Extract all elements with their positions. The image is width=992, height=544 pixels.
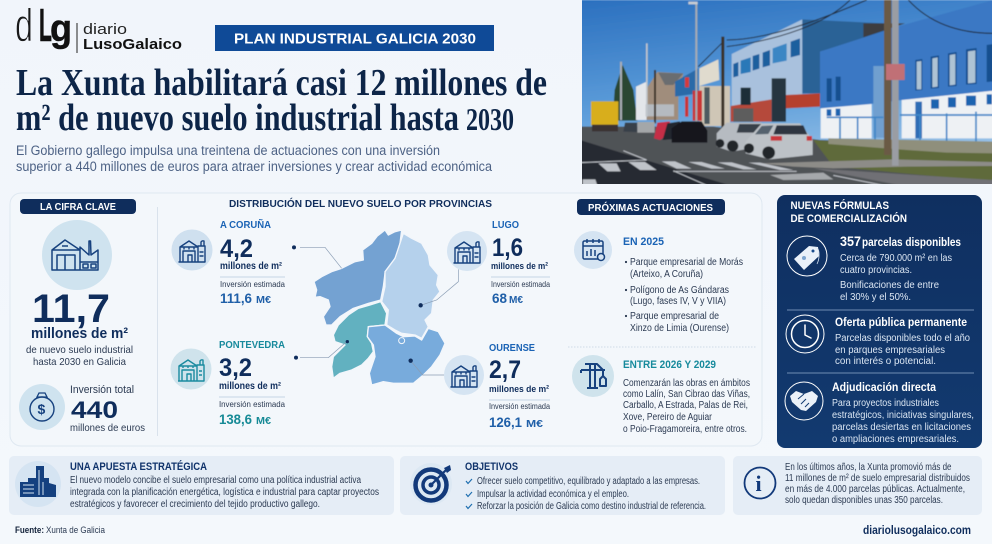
website: diariolusogalaico.com — [863, 525, 971, 537]
panel: la cifra clave — [19, 199, 145, 434]
province: Ourense: 126,1 — [489, 415, 522, 430]
icon: target — [410, 463, 452, 505]
subtitle — [16, 143, 492, 174]
item: 357 parcelas: el 30% y el 50%. — [840, 292, 911, 303]
text block: en 2025 — [623, 236, 743, 334]
key figure — [26, 287, 133, 368]
key figure: de nuevo suelo industrial — [26, 344, 133, 356]
icon: handshake — [785, 382, 823, 420]
province: A Coruña — [172, 218, 286, 306]
item: adjudicacion directa — [832, 380, 974, 445]
title: m² de nuevo suelo industrial hasta — [16, 97, 459, 139]
province: Ourense: 2,7 — [489, 356, 521, 384]
item: 357 parcelas — [840, 234, 961, 303]
badge: la cifra clave: LA CIFRA CLAVE — [40, 202, 116, 213]
text block: solo quedan disponibles unas 350 parcelas. — [785, 495, 943, 506]
province: A Coruña: A CORUÑA — [220, 218, 271, 231]
icon: building — [447, 231, 487, 271]
province: Lugo: M€ — [509, 295, 523, 306]
icon: factory — [42, 220, 112, 290]
item: oferta publica: Oferta pública permanente — [835, 317, 967, 329]
province: A Coruña: millones de m² — [220, 261, 283, 272]
text block: UNA APUESTA ESTRATÉGICA — [70, 460, 207, 473]
heading: DE COMERCIALIZACIÓN — [790, 212, 907, 225]
province: Lugo: millones de m² — [491, 261, 548, 272]
text block: en 2025: (Arteixo, A Coruña) — [630, 269, 703, 280]
section banner: PLAN INDUSTRIAL GALICIA 2030 — [234, 32, 476, 48]
panel: una apuesta estrategica — [9, 456, 394, 515]
text block: objectives: Reforzar la posición de Galicia como destino industrial de referencia. — [477, 501, 706, 512]
text block: en 2025: Parque empresarial de — [630, 311, 719, 322]
text block: en 2025: EN 2025 — [623, 236, 664, 248]
text block: entre 2026 y 2029: ENTRE 2026 Y 2029 — [623, 359, 716, 371]
province: Lugo: LUGO — [492, 219, 519, 231]
text block: objectives: OBJETIVOS — [465, 461, 518, 473]
province: Pontevedra: PONTEVEDRA — [219, 339, 285, 351]
item: oferta publica — [835, 317, 970, 367]
text block: en 2025: Xinzo de Limia (Ourense) — [630, 323, 729, 334]
panel: main data panel — [10, 193, 762, 446]
item: 357 parcelas: parcelas disponibles — [862, 237, 961, 249]
text block: entre 2026 y 2029: Carballo, A Estrada, Palas de Rei, — [623, 400, 748, 411]
province: Ourense: millones de m² — [489, 384, 549, 395]
text block: El nuevo modelo concibe el suelo empresarial como una política industrial activa — [70, 475, 361, 486]
icon: building — [444, 355, 484, 395]
text block: En los últimos años, la Xunta promovió más de — [785, 462, 952, 473]
text block: objectives: Ofrecer suelo competitivo, equilibrado y adaptado a las empresas. — [477, 476, 700, 487]
logo: diario LusoGalaico: g — [50, 8, 72, 50]
source: Fuente: — [15, 525, 44, 535]
logo: diario LusoGalaico — [15, 0, 182, 53]
map of Galicia — [292, 230, 458, 385]
heading: distribution by province: DISTRIBUCIÓN DEL NUEVO SUELO POR PROVINCIAS — [229, 197, 492, 210]
province: Ourense: OURENSE — [489, 342, 535, 354]
photo: industrial estate street — [580, 0, 992, 185]
badge: la cifra clave — [20, 199, 136, 214]
total investment — [70, 384, 145, 434]
item: oferta publica: con interés o potencial. — [835, 356, 936, 367]
badge: proximas actuaciones — [577, 199, 725, 215]
heading — [790, 199, 907, 225]
icon: building — [172, 230, 212, 270]
subtitle: El Gobierno gallego impulsa una treintena de actuaciones con una inversión — [16, 143, 440, 158]
item: 357 parcelas: Cerca de 790.000 m² en las — [840, 253, 952, 264]
title: 2030 — [466, 101, 514, 137]
panel: proximas actuaciones — [568, 199, 756, 435]
province: Lugo — [447, 219, 550, 306]
text block — [785, 462, 970, 506]
key figure: millones de m² — [31, 325, 128, 342]
region: Lugo — [382, 233, 440, 338]
text block: estratégicos y favorecer el crecimiento del tejido productivo gallego. — [70, 499, 320, 510]
total investment: 440 — [71, 397, 118, 424]
province: Lugo: 68 — [492, 291, 507, 306]
item: adjudicacion directa: o ampliaciones empresariales. — [832, 434, 959, 445]
text block: en 2025: Polígono de As Gándaras — [630, 285, 729, 296]
item: adjudicacion directa: parcelas desiertas en licitaciones — [832, 422, 971, 433]
text block — [70, 460, 379, 510]
title — [16, 62, 547, 139]
text block: en 2025: (Lugo, fases IV, V y VIIA) — [630, 296, 726, 307]
source — [15, 525, 105, 535]
item: adjudicacion directa: Para proyectos industriales — [832, 398, 939, 409]
region: A Coruña — [314, 230, 402, 325]
icon: price tag — [787, 236, 827, 276]
icon: calendar — [574, 231, 612, 269]
province: Lugo: Inversión estimada — [491, 280, 550, 289]
province: Pontevedra: 138,6 — [219, 412, 252, 427]
text block: entre 2026 y 2029: Xove, Pereiro de Aguiar — [623, 412, 713, 423]
region: Ourense — [367, 325, 445, 385]
region: Pontevedra — [332, 302, 387, 378]
item: adjudicacion directa: estratégicos, iniciativas singulares, — [832, 410, 974, 421]
province: Pontevedra: M€ — [256, 416, 271, 427]
item: oferta publica: Parcelas disponibles todo el año — [835, 333, 970, 344]
logo: diario LusoGalaico: d — [15, 0, 33, 51]
subtitle: superior a 440 millones de euros para atraer inversiones y crear actividad económica — [16, 159, 492, 174]
text block: objectives — [465, 461, 706, 512]
text block: en 2025: Parque empresarial de Morás — [630, 257, 743, 268]
heading: NUEVAS FÓRMULAS — [790, 199, 889, 212]
text block: entre 2026 y 2029 — [623, 359, 750, 435]
province: Ourense: M€ — [526, 419, 544, 430]
icon: clock — [786, 315, 824, 353]
text block: integrada con la planificación energética, logística e industrial para captar proyectos — [70, 487, 379, 498]
logo: diario LusoGalaico: L — [39, 0, 52, 51]
province: Pontevedra: 3,2 — [219, 354, 252, 382]
province: Pontevedra — [170, 339, 286, 427]
text block: objectives: Impulsar la actividad económica y el empleo. — [477, 489, 629, 500]
panel: nuevas formulas de comercializacion — [777, 195, 982, 448]
item: oferta publica: en parques empresariales — [835, 345, 945, 356]
icon: money bag: $ — [38, 401, 46, 417]
badge: proximas actuaciones: PRÓXIMAS ACTUACIONES — [588, 201, 713, 214]
item: 357 parcelas: Bonificaciones de entre — [840, 280, 939, 291]
item: 357 parcelas: 357 — [840, 234, 861, 249]
key figure: 11,7 — [32, 287, 110, 331]
title: La Xunta habilitará casi 12 millones de — [16, 62, 547, 104]
total investment: Inversión total — [70, 384, 134, 396]
province: Ourense: Inversión estimada — [489, 402, 550, 411]
key figure: hasta 2030 en Galicia — [33, 356, 126, 368]
total investment: millones de euros — [70, 422, 145, 434]
text block: entre 2026 y 2029: Comenzarán las obras en ámbitos — [623, 378, 750, 389]
divider: key figure and provinces — [157, 207, 158, 436]
province: A Coruña: 111,6 — [220, 291, 252, 306]
icon: money bag — [19, 384, 65, 430]
province: Pontevedra: millones de m² — [219, 381, 282, 392]
province: A Coruña: 4,2 — [220, 235, 253, 263]
text block: entre 2026 y 2029: o Poio-Fragamoreira, entre otros. — [623, 424, 747, 435]
panel: objetivos — [400, 456, 725, 515]
item: adjudicacion directa: Adjudicación directa — [832, 380, 936, 394]
icon: info: i — [756, 471, 762, 496]
icon: teal building — [170, 348, 212, 390]
province: A Coruña: M€ — [256, 295, 271, 306]
icon: city buildings — [15, 461, 61, 507]
text block: entre 2026 y 2029: como Lalín, San Cibrao das Viñas, — [623, 389, 750, 400]
source: Xunta de Galicia — [46, 525, 105, 535]
panel: info note — [733, 456, 982, 515]
province: A Coruña: Inversión estimada — [220, 280, 286, 289]
logo: diario LusoGalaico: LusoGalaico — [83, 36, 182, 53]
province: Lugo: 1,6 — [492, 234, 523, 262]
province: Pontevedra: Inversión estimada — [219, 400, 286, 409]
icon: crane — [572, 355, 614, 397]
section banner — [215, 25, 494, 51]
logo: diario LusoGalaico: diario — [83, 21, 127, 38]
icon: info — [744, 468, 776, 498]
item: 357 parcelas: cuatro provincias. — [840, 265, 912, 276]
province: Ourense — [444, 342, 550, 430]
